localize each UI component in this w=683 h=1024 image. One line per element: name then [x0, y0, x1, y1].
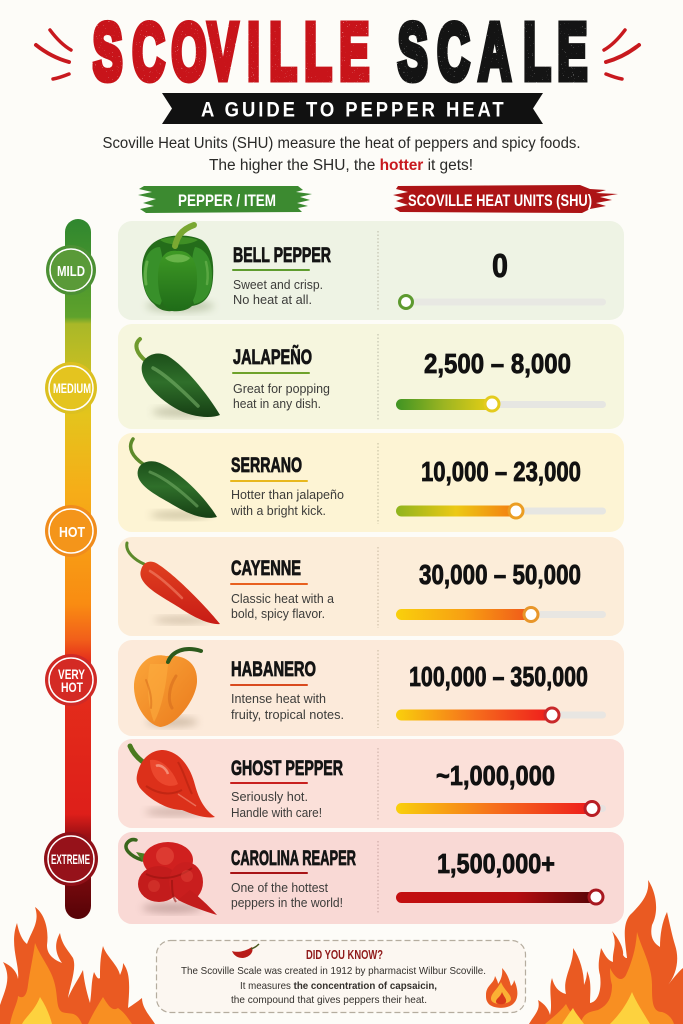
pepper name: CAROLINA REAPER — [231, 847, 356, 870]
subtitle ribbon — [162, 93, 543, 124]
description: fruity, tropical notes. — [231, 707, 344, 722]
SHU value: 10,000 – 23,000 — [421, 456, 581, 487]
SHU value: 1,500,000+ — [437, 848, 555, 879]
callout: did you know — [156, 940, 526, 1012]
description: peppers in the world! — [231, 895, 343, 910]
icon: jalapeno pepper — [136, 339, 220, 417]
title word: Scoville: SCOVILLE — [93, 6, 369, 96]
description: Great for popping — [233, 381, 330, 396]
badge: extreme — [44, 832, 98, 886]
badge: medium — [45, 362, 97, 414]
heat meter — [396, 802, 606, 816]
callout text: The Scoville Scale was created in 1912 by pharmacist Wilbur Scoville. — [181, 965, 486, 977]
name underline — [230, 782, 308, 784]
panel: bell pepper — [118, 221, 624, 320]
badge: very hot — [45, 654, 97, 706]
heat meter — [400, 296, 606, 308]
icon: left heat rays — [36, 30, 71, 79]
badge: hot — [45, 505, 97, 557]
title: Scoville Scale — [93, 6, 587, 96]
panel: serrano — [118, 433, 624, 532]
intro text: Scoville Heat Units (SHU) measure the heat of peppers and spicy foods. — [102, 135, 580, 152]
description: One of the hottest — [231, 880, 328, 895]
pepper name: HABANERO — [231, 658, 316, 681]
heat meter — [396, 608, 606, 622]
icon: ghost pepper — [130, 746, 215, 817]
ribbon shape — [162, 93, 543, 124]
panel: ghost pepper — [118, 739, 624, 828]
panel: carolina reaper — [118, 832, 624, 924]
icon: serrano pepper — [131, 439, 217, 519]
description — [230, 487, 344, 518]
SHU value: 0 — [492, 247, 508, 284]
intro text: The higher the SHU, the hotter it gets! — [209, 157, 473, 174]
description — [231, 789, 322, 820]
description: Hotter than jalapeño — [231, 487, 344, 502]
description: Intense heat with — [231, 691, 326, 706]
icon: cayenne pepper — [127, 543, 220, 624]
badge: extreme: EXTREME — [51, 851, 90, 867]
description — [233, 277, 323, 307]
description: bold, spicy flavor. — [231, 606, 325, 621]
description: Classic heat with a — [231, 591, 335, 606]
ribbon text: A GUIDE TO PEPPER HEAT — [201, 98, 504, 122]
badge: mild: MILD — [57, 263, 85, 280]
red brush stroke — [393, 185, 618, 213]
icon: bell pepper — [142, 225, 214, 312]
name underline — [230, 684, 308, 686]
description: Handle with care! — [231, 805, 322, 820]
heat meter — [396, 397, 606, 411]
intro text — [102, 135, 580, 174]
name underline — [230, 480, 308, 482]
description: Seriously hot. — [231, 789, 308, 804]
icon: small chili — [232, 944, 259, 958]
pepper name: SERRANO — [231, 454, 302, 477]
description: No heat at all. — [233, 292, 312, 307]
header label: SCOVILLE HEAT UNITS (SHU) — [408, 192, 592, 210]
panel: cayenne — [118, 537, 624, 636]
heat meter — [396, 708, 606, 722]
name underline — [230, 583, 308, 585]
name underline — [230, 872, 308, 874]
icon: carolina reaper — [126, 840, 217, 915]
column header: scoville heat units — [393, 185, 618, 213]
heat meter — [396, 890, 603, 904]
icon: right heat rays — [604, 30, 639, 79]
callout text — [181, 965, 486, 1006]
panel: habanero — [118, 640, 624, 736]
callout text: It measures the concentration of capsaicin, — [240, 980, 437, 992]
pepper name: CAYENNE — [231, 557, 301, 580]
badge: very hot: HOT — [61, 679, 83, 695]
badge: very hot: VERY — [58, 666, 85, 682]
name underline — [232, 269, 310, 271]
badge: hot: HOT — [59, 524, 85, 541]
SHU value: 2,500 – 8,000 — [424, 348, 571, 379]
icon: habanero pepper — [134, 649, 201, 727]
badge: medium: MEDIUM — [53, 380, 91, 396]
description: with a bright kick. — [230, 503, 326, 518]
description: Sweet and crisp. — [233, 277, 323, 292]
description: heat in any dish. — [233, 396, 321, 411]
pepper name: JALAPEÑO — [233, 346, 312, 369]
callout text: the compound that gives peppers their heat. — [231, 994, 427, 1006]
SHU value: ~1,000,000 — [436, 760, 555, 791]
title word: Scale: SCALE — [398, 6, 587, 96]
icon: small flame — [486, 968, 517, 1008]
heat thermometer bar — [65, 219, 91, 919]
name underline — [232, 372, 310, 374]
right flames — [529, 880, 683, 1024]
left flames — [0, 907, 155, 1024]
heat meter — [396, 504, 606, 518]
SHU value: 100,000 – 350,000 — [409, 661, 588, 692]
SHU value: 30,000 – 50,000 — [419, 559, 581, 590]
badge: mild — [46, 245, 96, 295]
description — [233, 381, 330, 411]
description — [231, 691, 344, 722]
header label: PEPPER / ITEM — [178, 192, 276, 210]
description — [231, 591, 335, 621]
pepper name: BELL PEPPER — [233, 244, 331, 267]
description — [231, 880, 343, 910]
column header: pepper / item — [138, 186, 312, 213]
callout heading: DID YOU KNOW? — [306, 948, 383, 962]
pepper name: GHOST PEPPER — [231, 757, 343, 780]
green brush stroke — [138, 186, 312, 213]
panel: jalapeno — [118, 324, 624, 429]
